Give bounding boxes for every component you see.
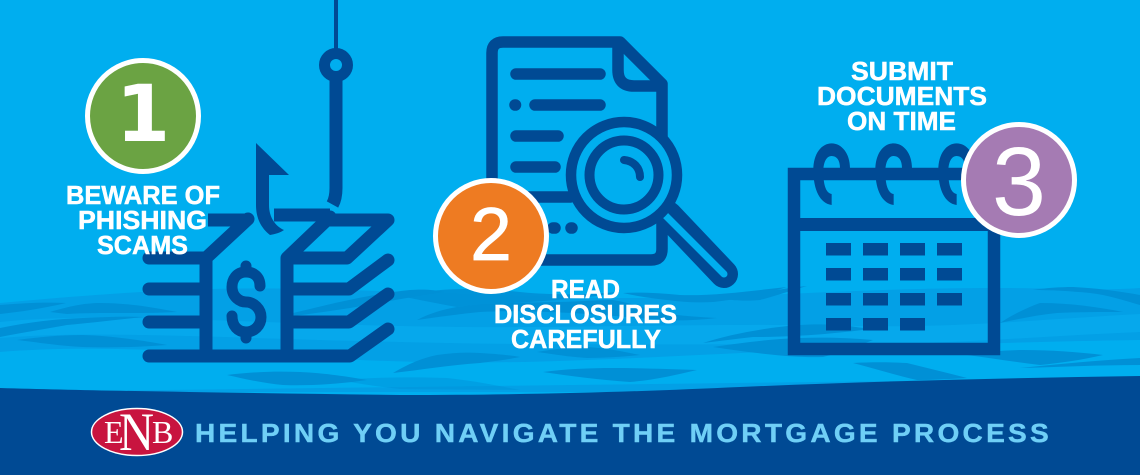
document fold <box>618 42 662 86</box>
document lines <box>515 74 600 228</box>
calendar rings <box>813 143 975 205</box>
icon: calendar <box>788 143 1000 349</box>
badge 1: 1 <box>116 70 170 160</box>
logo: ENB: B <box>152 414 173 450</box>
heading: read disclosures carefully: READ <box>551 274 620 304</box>
heading: submit documents on time <box>817 56 987 136</box>
badge 2 <box>436 180 546 292</box>
heading: beware of phishing scams <box>66 180 220 260</box>
document outline <box>492 42 662 260</box>
icon: dollar sign <box>232 266 261 338</box>
heading: submit documents on time: SUBMIT <box>851 56 953 86</box>
heading: beware of phishing scams: SCAMS <box>97 230 188 260</box>
heading: beware of phishing scams: PHISHING <box>78 205 207 235</box>
logo: ENB <box>92 402 182 462</box>
magnifier handle <box>664 214 724 274</box>
heading: submit documents on time: ON TIME <box>847 106 956 136</box>
logo: ENB: E <box>104 414 124 450</box>
badge 2: 2 <box>470 192 512 276</box>
heading: read disclosures carefully: CAREFULLY <box>511 324 661 354</box>
icon: document with magnifying glass <box>492 42 724 274</box>
heading: read disclosures carefully <box>494 274 677 354</box>
badge 3: 3 <box>992 127 1046 236</box>
badge 3 <box>964 124 1074 236</box>
icon: stack of money <box>149 215 388 356</box>
calendar date cells <box>826 243 962 330</box>
logo: ENB: N <box>119 402 154 462</box>
badge 1 <box>88 60 198 172</box>
water waves <box>0 286 1140 392</box>
footer band <box>0 376 1140 475</box>
heading: beware of phishing scams: BEWARE OF <box>66 180 220 210</box>
magnifier lens <box>571 122 677 228</box>
tagline: HELPING YOU NAVIGATE THE MORTGAGE PROCESS <box>195 418 1052 448</box>
icon: fish hook <box>256 0 348 235</box>
heading: read disclosures carefully: DISCLOSURES <box>494 299 677 329</box>
heading: submit documents on time: DOCUMENTS <box>817 81 987 111</box>
